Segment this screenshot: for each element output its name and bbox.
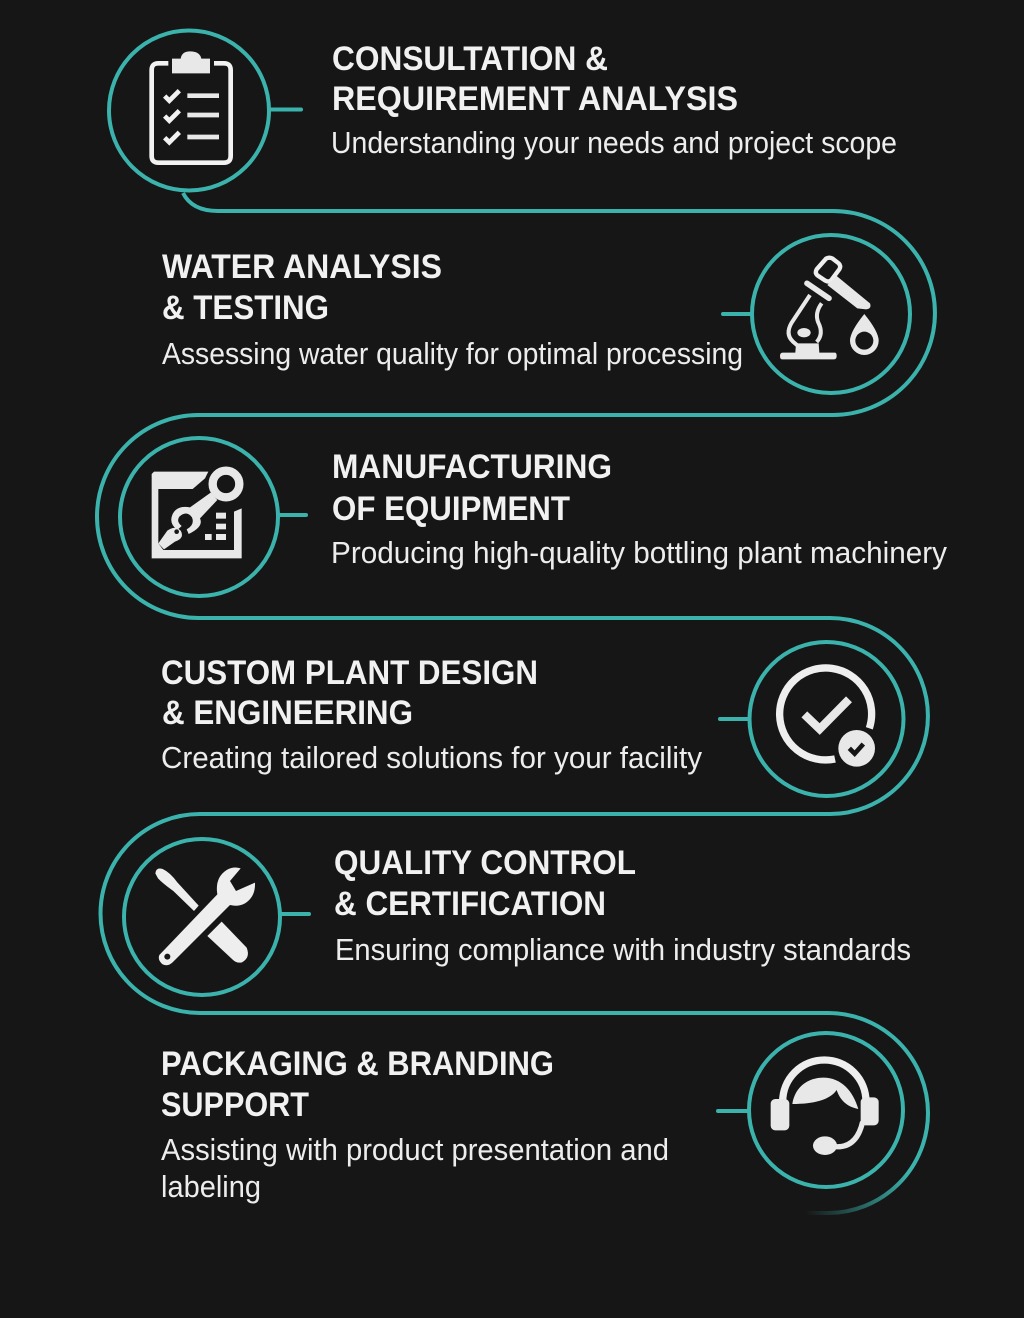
step 6 description: Assisting with product presentation and: [161, 1132, 669, 1167]
step 1 connector tick: [271, 108, 301, 112]
step 5 heading: [334, 844, 636, 923]
step 6: packaging: [161, 1033, 903, 1204]
step 1 heading: [332, 40, 738, 118]
icon: crossed wrench and screwdriver: [155, 867, 255, 965]
step 6 ring: [749, 1033, 903, 1187]
step 5 heading: QUALITY CONTROL: [334, 844, 636, 882]
step 3 heading: [332, 448, 612, 528]
step 6 description: [161, 1132, 669, 1204]
step 3 heading: MANUFACTURING: [332, 448, 612, 486]
step 6 heading: SUPPORT: [161, 1086, 309, 1124]
step 4 heading: CUSTOM PLANT DESIGN: [161, 654, 538, 692]
step 6 connector tick: [718, 1109, 748, 1113]
connector path: [97, 193, 935, 1113]
step 5 heading: & CERTIFICATION: [334, 885, 606, 923]
step 4 heading: & ENGINEERING: [162, 694, 413, 732]
step 2 description: Assessing water quality for optimal processing: [162, 336, 743, 371]
step 2 heading: [162, 248, 442, 327]
step 4 connector tick: [720, 717, 748, 721]
step 1 description: Understanding your needs and project scope: [331, 125, 897, 160]
step 6 heading: [161, 1045, 554, 1124]
step 6 heading: PACKAGING & BRANDING: [161, 1045, 554, 1083]
step 3 description: Producing high-quality bottling plant machinery: [331, 535, 947, 570]
step 1 heading: REQUIREMENT ANALYSIS: [332, 80, 738, 118]
step 1 ring: [109, 30, 269, 190]
step 3 ring: [120, 438, 278, 596]
step 1: consultation: [109, 30, 897, 190]
icon: clipboard checklist: [152, 51, 231, 163]
step 4 ring: [750, 642, 904, 796]
step 5: quality control: [124, 839, 911, 995]
step 5 connector tick: [281, 912, 309, 916]
step 4 heading: [161, 654, 538, 732]
step 3: manufacturing: [120, 438, 947, 596]
step 2 ring: [752, 235, 910, 393]
step 2: water analysis: [162, 235, 910, 393]
icon: drawing with wrench: [152, 471, 242, 558]
step 5 ring: [124, 839, 280, 995]
step 2 heading: & TESTING: [162, 289, 329, 327]
step 6 description: labeling: [161, 1169, 261, 1204]
icon: headset: [771, 1060, 879, 1155]
step 1 heading: CONSULTATION &: [332, 40, 608, 78]
step 3 connector tick: [278, 513, 306, 517]
icon: check circle with badge: [780, 668, 875, 767]
step 5 description: Ensuring compliance with industry standards: [335, 932, 911, 967]
step 3 heading: OF EQUIPMENT: [332, 490, 570, 528]
step 4: custom design: [161, 642, 904, 796]
step 4 description: Creating tailored solutions for your facility: [161, 740, 702, 775]
connector fade end: [800, 1113, 928, 1213]
step 2 connector tick: [723, 312, 751, 316]
icon: dropper and flask: [780, 258, 879, 359]
step 2 heading: WATER ANALYSIS: [162, 248, 442, 286]
